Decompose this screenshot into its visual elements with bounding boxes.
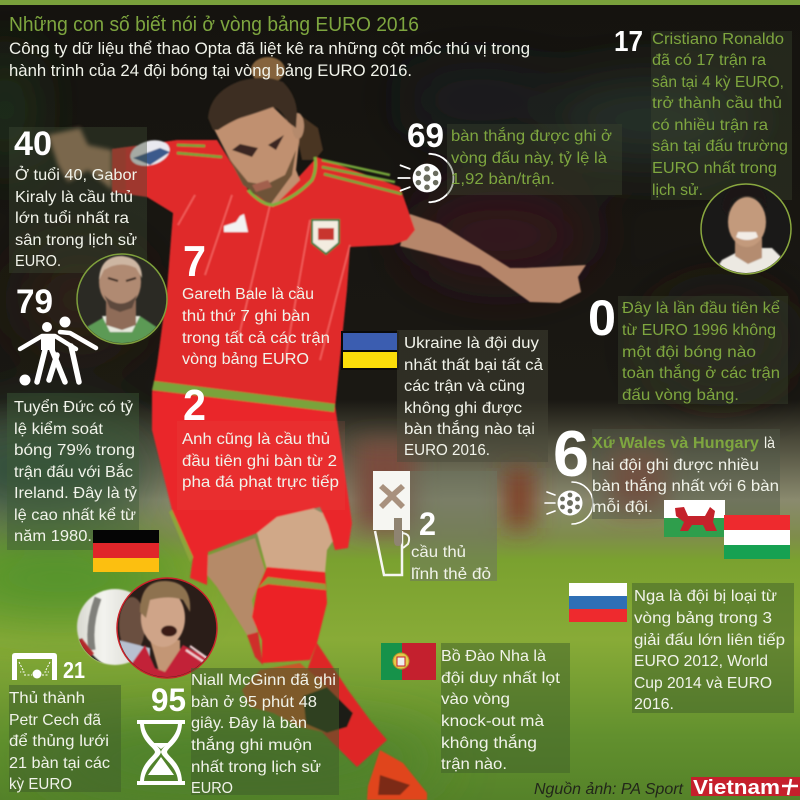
text panel: có nhiều trận ra xyxy=(652,117,768,134)
text block: sân trong lịch sử xyxy=(15,232,137,249)
text panel: hai đội ghi được nhiều xyxy=(592,457,759,474)
panel: Russia: Nga là đội bị loại từ xyxy=(634,588,777,605)
panel: Germany possession: lệ kiểm soát xyxy=(14,420,104,438)
panel: Niall McGinn: giây. Đây là bàn xyxy=(191,715,307,732)
shorts xyxy=(152,392,352,585)
stat: 79 possession xyxy=(16,283,96,386)
portrait: Niall McGinn xyxy=(117,578,217,680)
ear xyxy=(292,113,304,139)
text panel: lịch sử. xyxy=(652,182,703,199)
icon: players with ball xyxy=(20,316,96,386)
panel: Niall McGinn: nhất trong lịch sử xyxy=(191,759,321,776)
text panel: Anh cũng là cầu thủ xyxy=(182,431,330,448)
text panel: mỗi đội. xyxy=(592,497,653,516)
panel: Russia: vòng bảng trong 3 xyxy=(634,610,772,627)
face and neck xyxy=(213,107,300,207)
shirt xyxy=(112,140,415,408)
beard xyxy=(230,150,296,205)
text panel: sân tại 4 kỳ EURO, xyxy=(652,74,784,91)
cuff xyxy=(112,147,126,192)
intro text: Công ty dữ liệu thể thao Opta đã liệt kê ra những cột mốc thú vị trong xyxy=(9,39,530,58)
panel: Russia xyxy=(632,583,794,713)
text panel: pha đá phạt trực tiếp xyxy=(182,474,339,491)
panel: Portugal: trận nào. xyxy=(441,756,507,773)
panel: Niall McGinn: Niall McGinn đã ghi xyxy=(191,672,336,689)
text panel: đã có 17 trận ra xyxy=(652,52,766,69)
logo: Vietnam+: Vietnam xyxy=(693,777,780,799)
kicking boot xyxy=(242,663,353,733)
panel: Ukraine: Ukraine là đội duy xyxy=(404,335,539,352)
panel: Petr Cech xyxy=(9,685,121,793)
icon: goal xyxy=(12,653,57,680)
left hand xyxy=(48,128,112,190)
text panel: sân tại đấu trường xyxy=(652,138,788,155)
text panel: toàn thắng ở các trận xyxy=(622,363,780,382)
panel: Russia: EURO 2012, World xyxy=(634,653,768,670)
stat: 69 goals xyxy=(398,117,622,202)
panel: Ukraine: không ghi được xyxy=(404,400,522,417)
panel: Germany possession xyxy=(7,393,139,550)
shoulder stripes right xyxy=(177,145,402,194)
flag: Hungary xyxy=(724,515,790,559)
text block: Ở tuổi 40, Gabor xyxy=(15,165,138,184)
panel: Germany possession: bóng 79% trong xyxy=(14,442,135,459)
text panel: EURO nhất trong xyxy=(652,160,777,177)
text block: vòng bảng EURO xyxy=(182,351,309,368)
hair top xyxy=(208,78,297,130)
panel: Ukraine xyxy=(397,330,548,462)
badge on sleeve xyxy=(128,136,172,170)
panel: Portugal: Bồ Đào Nha là xyxy=(441,648,546,665)
text panel: đấu vòng bảng. xyxy=(622,387,739,404)
text panel: bàn thắng được ghi ở xyxy=(451,126,613,145)
stat: 0 xyxy=(588,290,788,404)
text block: Kiraly là cầu thủ xyxy=(15,189,133,206)
stat: 6 goals: 6 xyxy=(553,417,589,490)
stat: Ronaldo 17: 17 xyxy=(614,26,643,58)
green shorts edge xyxy=(169,510,193,562)
text block: Gareth Bale là cầu xyxy=(182,286,314,303)
text block xyxy=(182,286,330,368)
flag: Portugal xyxy=(381,643,436,680)
icon: ball xyxy=(398,154,453,202)
panel: Ukraine: bàn thắng nào tại xyxy=(404,419,535,438)
text block: thủ thứ 7 ghi bàn xyxy=(182,308,310,325)
text panel: vòng đấu này, tỷ lệ là xyxy=(451,150,607,167)
panel: Germany possession: trận đấu với Bắc xyxy=(14,462,133,481)
right arm and hand xyxy=(400,214,586,303)
adidas logo xyxy=(224,214,248,232)
small red sock xyxy=(247,632,263,665)
player: Gareth Bale xyxy=(48,57,586,800)
text block: lớn tuổi nhất ra xyxy=(15,209,129,227)
text panel: trở thành cầu thủ xyxy=(652,95,782,112)
stat: 2 red cards: cầu thủ xyxy=(411,544,466,561)
panel: Gabor Kiraly 40 xyxy=(9,125,147,273)
stat: 6 goals xyxy=(545,417,780,524)
text panel: là xyxy=(764,435,775,452)
football xyxy=(76,588,132,666)
stat: Gareth Bale 2 xyxy=(177,381,345,510)
panel: Portugal xyxy=(441,643,570,773)
icon: ball xyxy=(545,482,593,524)
panel: Portugal: vào vòng xyxy=(441,691,510,708)
eyes and mouth xyxy=(232,135,284,157)
collar xyxy=(248,157,316,205)
title: Những con số biết nói ở vòng bảng EURO 2016 xyxy=(9,14,419,36)
panel: Russia: 2016. xyxy=(634,696,674,713)
stat: 21 goals: 21 xyxy=(63,657,85,683)
stat: 95 minutes: 95 xyxy=(151,682,186,718)
flag: Wales xyxy=(664,500,725,537)
stat: 2 red cards xyxy=(410,471,497,583)
panel: Russia: Cup 2014 và EURO xyxy=(634,675,772,692)
stat: Ronaldo 17 xyxy=(614,26,792,200)
text panel: 1,92 bàn/trận. xyxy=(451,171,555,188)
stat: 0: 0 xyxy=(588,290,616,346)
panel: Petr Cech: 21 bàn tại các xyxy=(9,755,110,772)
panel: Russia: giải đấu lớn liên tiếp xyxy=(634,632,785,649)
panel: Petr Cech: để thủng lưới xyxy=(9,732,109,750)
text panel: Cristiano Ronaldo xyxy=(652,31,784,48)
stat: Gareth Bale 7: 7 xyxy=(183,237,206,286)
panel: Portugal: knock-out mà xyxy=(441,713,544,730)
panel: Portugal: không thắng xyxy=(441,733,537,752)
flag: Germany xyxy=(93,530,159,572)
panel: Niall McGinn: thắng ghi muộn xyxy=(191,735,312,754)
text panel xyxy=(177,421,345,510)
shirt pin stripes xyxy=(178,195,350,360)
stat: Gareth Bale 7 xyxy=(182,237,330,368)
top bar xyxy=(0,0,800,5)
source credit: Nguồn ảnh: PA Sport xyxy=(534,781,684,798)
icon: red card hand xyxy=(373,471,410,575)
text panel: từ EURO 1996 không xyxy=(622,322,776,339)
text panel xyxy=(618,296,788,404)
panel: Niall McGinn: bàn ở 95 phút 48 xyxy=(191,694,317,711)
text block: EURO. xyxy=(15,253,61,270)
portrait: Ronaldo xyxy=(701,184,791,280)
far leg and boot xyxy=(300,643,427,800)
text block: trong tất cả các trận xyxy=(182,330,330,347)
text panel: Xứ Wales và Hungary xyxy=(592,435,759,452)
text panel: một đội bóng nào xyxy=(622,344,756,361)
standing thigh skin xyxy=(195,538,265,635)
text panel: bàn thắng nhất với 6 bàn xyxy=(592,476,779,495)
panel: Niall McGinn: EURO xyxy=(191,780,233,797)
crest xyxy=(312,220,339,254)
panel: Petr Cech: kỳ EURO xyxy=(9,776,72,793)
panel: Ukraine: nhất thất bại tất cả xyxy=(404,357,543,374)
text panel xyxy=(592,429,780,519)
panel: Germany possession: Ireland. Đây là tỷ xyxy=(14,485,137,502)
panel: Petr Cech: Petr Cech đã xyxy=(9,712,101,729)
stat: 2 red cards: lĩnh thẻ đỏ xyxy=(411,566,491,583)
text panel xyxy=(447,124,622,195)
panel: Ukraine: EURO 2016. xyxy=(404,442,490,459)
hair back xyxy=(296,112,323,160)
panel: Petr Cech: Thủ thành xyxy=(9,690,85,707)
text block xyxy=(15,165,138,270)
stat: 79 possession: 79 xyxy=(16,283,53,321)
panel: Germany possession: Tuyển Đức có tỷ xyxy=(14,398,133,416)
text panel xyxy=(651,31,792,200)
panel: Ukraine: các trận và cũng xyxy=(404,378,525,395)
sock xyxy=(252,567,327,663)
panel: Portugal: đội duy nhất lọt xyxy=(441,670,561,687)
panel: Germany possession: lệ cao nhất kể từ xyxy=(14,506,136,524)
text panel: đầu tiên ghi bàn từ 2 xyxy=(182,453,337,470)
hair bun xyxy=(251,57,285,83)
intro text: hành trình của 24 đội bóng tại vòng bảng EURO 2016. xyxy=(9,61,412,80)
icon: hourglass xyxy=(137,720,185,785)
panel: Gabor Kiraly 40: 40 xyxy=(14,125,52,163)
stat: 2 red cards: 2 xyxy=(419,506,436,542)
stat: Gareth Bale 2: 2 xyxy=(183,381,206,430)
flag: Ukraine xyxy=(341,331,399,370)
text panel: Đây là lần đầu tiên kể xyxy=(622,299,780,317)
intro text xyxy=(9,39,530,80)
front thigh skin xyxy=(257,505,338,573)
hem xyxy=(152,381,335,412)
stat: 69 goals: 69 xyxy=(407,117,444,155)
flag: Russia xyxy=(569,583,627,622)
panel: Germany possession: năm 1980. xyxy=(14,528,92,545)
panel: Niall McGinn xyxy=(191,668,339,797)
portrait: Kiraly xyxy=(77,254,168,345)
